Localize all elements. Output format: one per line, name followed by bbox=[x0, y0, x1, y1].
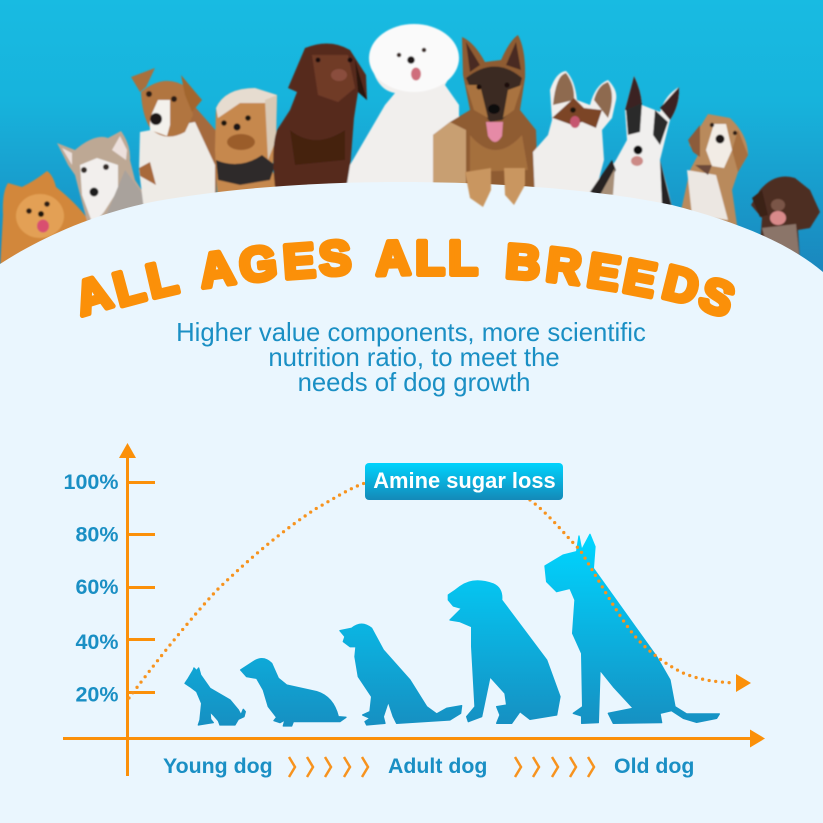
silhouette: dachshund bbox=[241, 659, 346, 726]
title: All Ages All Breeds: A bbox=[196, 241, 238, 299]
title: All Ages All Breeds: R bbox=[543, 239, 584, 295]
title: All Ages All Breeds: L bbox=[108, 259, 150, 317]
age label: old dog: Old dog bbox=[614, 754, 694, 778]
dog: german shorthaired pointer bbox=[751, 176, 820, 262]
title: All Ages All Breeds: L bbox=[448, 232, 478, 286]
dog: bull terrier bbox=[590, 76, 679, 215]
silhouette: great dane bbox=[545, 534, 719, 723]
dog: husky bbox=[57, 131, 155, 232]
subtitle text block bbox=[176, 319, 646, 397]
subtitle text block: nutrition ratio, to meet the bbox=[268, 344, 560, 372]
callout: amine sugar loss: Amine sugar loss bbox=[373, 468, 556, 493]
y-axis percentage labels: 40% bbox=[75, 630, 118, 654]
title: All Ages All Breeds: S bbox=[318, 232, 352, 286]
title: All Ages All Breeds: D bbox=[658, 256, 704, 316]
y-axis percentage labels: 100% bbox=[64, 470, 118, 494]
german shepherd paws over the panel bbox=[465, 168, 525, 207]
panel: light rounded content area bbox=[0, 182, 823, 823]
dog: beagle bbox=[680, 114, 748, 232]
silhouette: retriever bbox=[340, 624, 462, 725]
title: All Ages All Breeds: A bbox=[69, 266, 118, 326]
title: All Ages All Breeds: B bbox=[504, 235, 542, 291]
y-axis percentage labels: 60% bbox=[75, 575, 118, 599]
y-axis ticks bbox=[128, 481, 155, 694]
x-axis with arrow bbox=[63, 730, 765, 748]
title: All Ages All Breeds bbox=[69, 232, 741, 328]
dog: chocolate labrador bbox=[273, 43, 367, 195]
dog: jack russell bbox=[131, 68, 218, 218]
title: All Ages All Breeds: L bbox=[415, 232, 445, 286]
age label: young dog: Young dog bbox=[163, 754, 273, 778]
dotted curve rising bbox=[129, 483, 365, 698]
chart: amine sugar loss by dog age bbox=[63, 443, 765, 778]
y-axis percentage labels: 80% bbox=[75, 522, 118, 546]
dog: bichon bbox=[346, 24, 459, 190]
silhouette: large dog bbox=[448, 581, 560, 723]
dog: yorkshire terrier bbox=[215, 88, 286, 205]
chevrons: young to adult bbox=[289, 757, 368, 777]
dog: german shepherd body bbox=[433, 35, 538, 190]
dog group photo row bbox=[0, 24, 820, 270]
chevrons: adult to old bbox=[515, 757, 594, 777]
y-axis percentage labels: 20% bbox=[75, 682, 118, 706]
dog: papillon bbox=[533, 71, 616, 205]
y-axis percentage labels bbox=[64, 470, 118, 706]
callout: amine sugar loss bbox=[365, 463, 563, 500]
subtitle text block: needs of dog growth bbox=[298, 369, 530, 397]
age label: adult dog: Adult dog bbox=[388, 754, 487, 778]
title: All Ages All Breeds: E bbox=[619, 250, 661, 308]
title: All Ages All Breeds: A bbox=[375, 232, 411, 286]
y-axis with arrow bbox=[119, 443, 136, 776]
silhouette: puppy bbox=[185, 668, 245, 725]
title: All Ages All Breeds: S bbox=[693, 268, 741, 328]
title: All Ages All Breeds: E bbox=[584, 244, 624, 302]
dotted curve falling with arrow bbox=[530, 500, 751, 692]
dog: pomeranian bbox=[0, 171, 88, 270]
title: All Ages All Breeds: G bbox=[237, 237, 279, 293]
subtitle text block: Higher value components, more scientific bbox=[176, 319, 646, 347]
background: blue sky bbox=[0, 0, 823, 290]
title: All Ages All Breeds: E bbox=[281, 234, 317, 290]
title: All Ages All Breeds: L bbox=[142, 251, 182, 309]
